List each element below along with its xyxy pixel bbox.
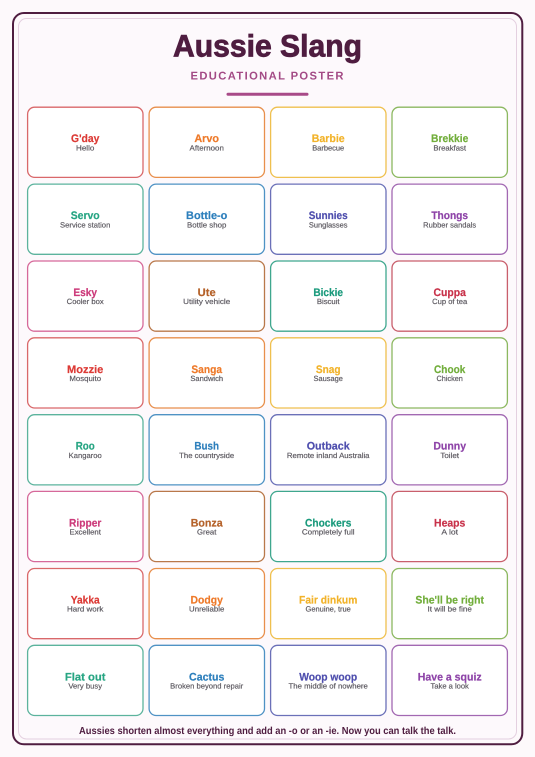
card: Chook [392,338,507,408]
card: Brekkie: Breakfast [433,143,467,152]
subtitle: EDUCATIONAL POSTER [190,71,344,83]
card: Dunny: Dunny [433,441,466,453]
card: Barbie [271,107,386,177]
card: Bonza: Great [197,528,217,537]
card: Woop woop: Woop woop [299,671,358,683]
title: Aussie Slang [173,29,362,64]
card: Servo: Service station [60,220,110,229]
card: Bickie [271,261,386,331]
card: She'll be right [392,568,507,639]
card: Ute: Utility vehicle [183,297,230,306]
card: Sunnies: Sunnies [309,210,348,222]
card: Cuppa [392,261,507,331]
card: Arvo [149,107,264,177]
card: She'll be right: She'll be right [415,594,484,606]
card: G'day: Hello [76,143,94,152]
card: Outback: Remote inland Australia [287,451,370,460]
card: Arvo: Arvo [194,133,219,145]
card: Chockers: Chockers [305,517,351,529]
card: Flat out: Very busy [68,682,102,690]
card: Bush [149,415,264,485]
card: Fair dinkum: Fair dinkum [299,594,358,606]
card: Ripper: Excellent [70,528,102,537]
card: Bonza [149,491,264,562]
card: Sanga: Sanga [191,364,223,376]
card: Chockers: Completely full [302,528,355,537]
card: Outback [271,415,386,485]
card: Flat out [28,645,143,716]
card: Chook: Chook [434,364,466,376]
card: Servo [28,184,143,254]
card: She'll be right: It will be fine [428,605,472,614]
card: Heaps: A lot [441,528,459,537]
card: Ute: Ute [198,287,216,299]
card: Chook: Chicken [437,374,463,383]
title underline [226,93,308,96]
card: Mozzie: Mosquito [69,374,101,383]
card: Brekkie: Brekkie [431,133,468,145]
card: G'day: G'day [71,133,99,145]
card: Snag [271,338,386,408]
card: Bush: Bush [194,441,219,453]
card: Servo: Servo [71,210,100,222]
card: Dodgy: Dodgy [191,594,223,606]
card: Yakka: Hard work [67,605,104,614]
card: Yakka [28,568,143,639]
card: Bickie: Bickie [313,287,343,299]
card: Roo: Roo [76,441,95,453]
card: Ripper [28,491,143,562]
card: Esky: Esky [73,287,97,299]
card: Roo: Kangaroo [69,451,102,460]
card: Fair dinkum [271,568,386,639]
card: Mozzie [28,338,143,408]
card: Chockers [271,491,386,562]
card: Sunnies [271,184,386,254]
card: Heaps [392,491,507,562]
card: Dunny: Toilet [440,451,460,460]
card: Esky [28,261,143,331]
card: Dunny [392,415,507,485]
card: Woop woop: The middle of nowhere [289,682,368,690]
card: Woop woop [271,645,386,716]
card: Roo [28,415,143,485]
card: Dodgy: Unreliable [189,605,224,614]
card: Bottle-o: Bottle-o [186,210,228,222]
card: Cactus: Broken beyond repair [170,682,244,690]
card: Mozzie: Mozzie [67,364,103,376]
card: G'day [28,107,143,177]
card: Cactus [149,645,264,716]
card: Ripper: Ripper [69,517,102,529]
card: Sanga [149,338,264,408]
card: Snag: Sausage [314,374,343,383]
card: Sunnies: Sunglasses [309,220,348,229]
card: Bonza: Bonza [191,517,224,529]
card: Cuppa: Cup of tea [432,297,468,306]
card: Bickie: Biscuit [317,297,340,306]
card: Yakka: Yakka [71,594,101,606]
card: Thongs: Rubber sandals [423,220,476,229]
card: Ute [149,261,264,331]
card: Outback: Outback [307,441,351,453]
card: Sanga: Sandwich [190,374,223,383]
card: Flat out: Flat out [65,671,106,683]
card: Have a squiz [392,645,507,716]
card: Arvo: Afternoon [190,143,224,152]
card: Bush: The countryside [179,451,234,460]
card: Have a squiz: Have a squiz [418,671,482,683]
card: Thongs [392,184,507,254]
card: Snag: Snag [316,364,341,376]
card: Barbie: Barbecue [312,143,344,152]
card: Barbie: Barbie [312,133,345,145]
footer note: Aussies shorten almost everything and add an -o or an -ie. Now you can talk the talk. [79,726,456,737]
card: Brekkie [392,107,507,177]
card: Bottle-o: Bottle shop [187,220,226,229]
card: Heaps: Heaps [434,517,465,529]
card: Esky: Cooler box [67,297,104,306]
card: Cactus: Cactus [189,671,224,683]
card: Bottle-o [149,184,264,254]
card: Cuppa: Cuppa [434,287,467,299]
card: Dodgy [149,568,264,639]
card: Thongs: Thongs [431,210,468,222]
card: Have a squiz: Take a look [431,682,469,690]
card: Fair dinkum: Genuine, true [306,605,351,614]
